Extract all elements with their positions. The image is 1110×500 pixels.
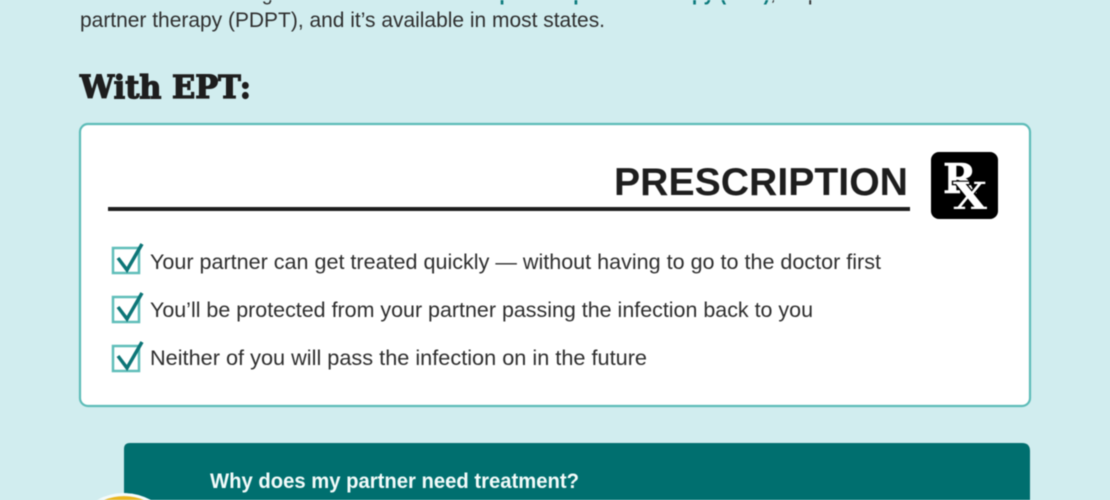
icon: Rx symbol (931, 152, 998, 219)
panel: why treatment (124, 443, 1030, 500)
intro text: partner therapy (PDPT), and it’s available in most states. (80, 9, 605, 32)
checklist item 2: You’ll be protected from your partner passing the infection back to you (150, 298, 813, 322)
icon: Rx symbol: R (943, 155, 977, 203)
question heading: Why does my partner need treatment? (210, 470, 579, 493)
checklist item 1: Your partner can get treated quickly — without having to go to the doctor first (150, 250, 881, 274)
intro text (80, 0, 970, 32)
heading: With EPT: With EPT: (79, 68, 251, 106)
prescription heading: PRESCRIPTION (614, 161, 908, 204)
icon: Rx symbol: X (953, 174, 987, 218)
checklist item 3: Neither of you will pass the infection on in the future (150, 346, 647, 370)
panel: prescription card (80, 124, 1030, 406)
icon: yellow circle (97, 493, 151, 500)
heading rule (108, 207, 910, 211)
